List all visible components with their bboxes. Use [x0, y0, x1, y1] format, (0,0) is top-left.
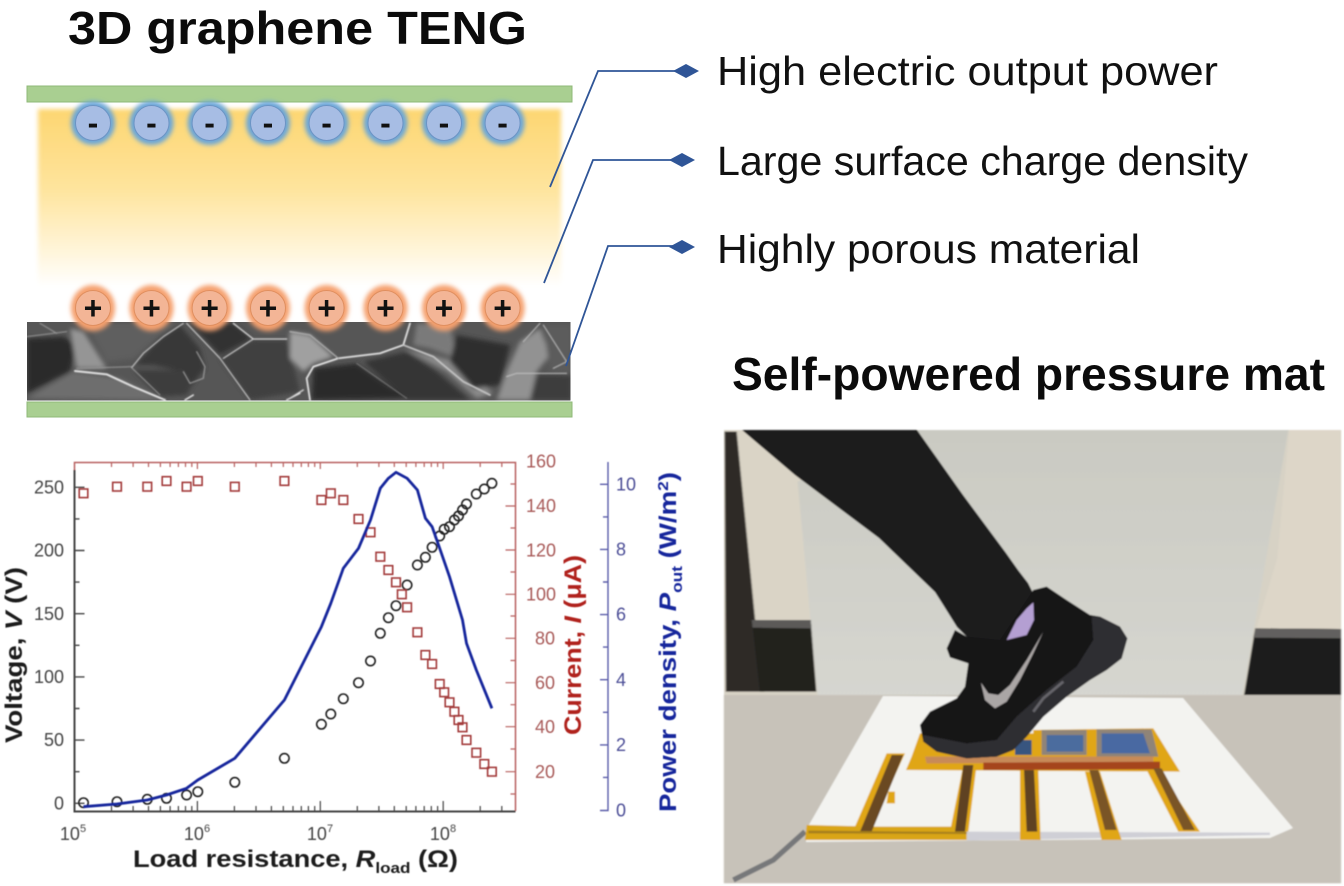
negative charges row: - [263, 105, 273, 141]
voltage axis title: Voltage, V (V) [1, 567, 28, 743]
power tick labels: 6 [616, 604, 626, 624]
voltage tick labels: 150 [34, 604, 64, 624]
current tick labels: 40 [535, 717, 555, 737]
x axis tick labels: 8 [450, 823, 456, 835]
x axis title: load [375, 860, 410, 877]
negative charges row: - [88, 105, 98, 141]
positive charges row: + [493, 290, 512, 326]
callout: large surface charge density: Large surface charge density [717, 138, 1248, 184]
negative charges row: - [204, 105, 215, 141]
panel: TENG device diagram [27, 86, 572, 417]
current axis title: Current, I (μA) [560, 555, 587, 735]
power density axis title: ) [655, 472, 682, 481]
power tick labels: 10 [616, 474, 636, 494]
power tick labels: 0 [616, 800, 626, 820]
positive charges row: + [376, 290, 395, 326]
current data points [84, 481, 492, 772]
negative charges row: - [321, 105, 332, 141]
current tick labels: 20 [535, 762, 555, 782]
power density axis title: (W/m [655, 491, 682, 566]
callout: large surface charge density [544, 138, 1248, 283]
x axis tick labels: 10 [60, 824, 80, 844]
x axis title: Load resistance, R [133, 846, 373, 873]
heading: self-powered pressure mat: Self-powered pressure mat [732, 348, 1325, 400]
positive charges row: + [259, 290, 277, 326]
plot frame and axes [74, 462, 608, 812]
lavender sock [1007, 602, 1034, 640]
callout: highly porous material: Highly porous material [717, 226, 1140, 272]
voltage tick labels: 250 [34, 478, 64, 498]
shoe sole [923, 617, 1127, 758]
x axis tick labels: 10 [430, 824, 450, 844]
power density axis title: Power density, P [655, 595, 682, 812]
title: 3D graphene TENG: 3D graphene TENG [68, 2, 527, 54]
x axis tick labels [60, 823, 456, 844]
negative charges row: - [380, 105, 391, 141]
positive charges row: + [200, 290, 219, 326]
callout: high electric output power: High electric output power [717, 48, 1218, 94]
voltage tick labels [34, 478, 64, 814]
current tick labels [526, 452, 556, 782]
white mat sheet with tape and TENG cells [733, 696, 1293, 880]
x axis tick labels: 7 [327, 823, 333, 835]
voltage tick labels: 200 [34, 540, 64, 560]
negative charges row: - [497, 105, 508, 141]
leg in black leggings [742, 430, 1035, 645]
callout: high electric output power [550, 48, 1218, 187]
negative charges row: - [439, 105, 449, 141]
wall and floor background [724, 430, 1341, 883]
voltage tick labels: 100 [34, 667, 64, 687]
x axis tick labels: 10 [307, 824, 327, 844]
power tick labels: 4 [616, 670, 626, 690]
swoosh logo [981, 632, 1043, 708]
current tick labels: 80 [535, 628, 555, 648]
graphene foam SEM layer [27, 322, 572, 400]
negative charges row [71, 101, 525, 145]
positive charges row: + [142, 290, 161, 326]
voltage tick labels: 50 [44, 730, 64, 750]
x axis tick labels: 5 [80, 823, 86, 835]
x axis tick labels: 6 [204, 823, 210, 835]
x axis title: (Ω) [410, 846, 458, 873]
negative charges row: - [146, 105, 157, 141]
current tick labels: 100 [526, 584, 556, 604]
top ticks [112, 462, 502, 469]
current tick labels: 140 [526, 496, 556, 516]
positive charges row: + [435, 290, 453, 326]
power tick labels: 2 [616, 735, 626, 755]
positive charges row [71, 285, 525, 331]
x axis tick labels: 10 [184, 824, 204, 844]
black shoe [920, 587, 1127, 758]
current tick labels: 160 [526, 452, 556, 472]
positive charges row: + [84, 290, 102, 326]
power density axis title: out [669, 566, 686, 593]
power tick labels [616, 474, 636, 820]
voltage tick labels: 0 [54, 794, 64, 814]
photo: foot pressing mat [724, 430, 1341, 883]
yellow gap field gradient [38, 109, 561, 287]
current tick labels: 60 [535, 673, 555, 693]
current ticks [506, 484, 516, 794]
chart: voltage, current and power density versus load resistance [1, 452, 686, 877]
top green electrode [27, 86, 572, 102]
power density axis [600, 462, 608, 810]
voltage data points [84, 483, 492, 803]
callout: highly porous material [566, 226, 1140, 366]
power tick labels: 8 [616, 540, 626, 560]
current tick labels: 120 [526, 540, 556, 560]
voltage ticks [74, 487, 84, 803]
power density axis title: 2 [655, 481, 672, 491]
power density curve [84, 472, 492, 807]
x axis log ticks [112, 801, 502, 811]
positive charges row: + [317, 290, 336, 326]
bottom green electrode [27, 402, 572, 417]
cable [733, 832, 805, 880]
